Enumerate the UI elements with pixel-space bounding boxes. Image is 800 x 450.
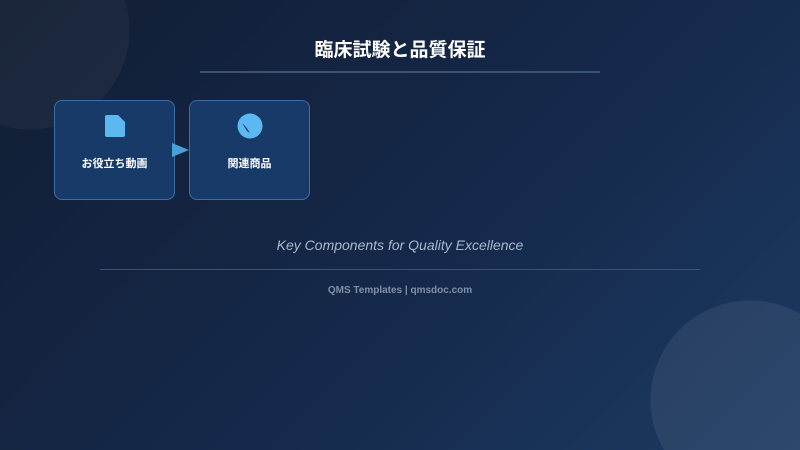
label: 関連商品	[228, 158, 272, 170]
icon: globe	[238, 114, 262, 138]
divider	[100, 269, 700, 270]
title: 臨床試験と品質保証	[314, 40, 486, 61]
subtitle: Key Components for Quality Excellence	[277, 237, 523, 253]
label: お役立ち動画	[82, 158, 148, 170]
card: 関連商品	[189, 100, 310, 200]
icon: document	[105, 115, 125, 137]
arrow	[172, 143, 189, 157]
title underline	[200, 71, 600, 73]
footer: QMS Templates | qmsdoc.com	[328, 285, 472, 296]
card: お役立ち動画	[54, 100, 175, 200]
